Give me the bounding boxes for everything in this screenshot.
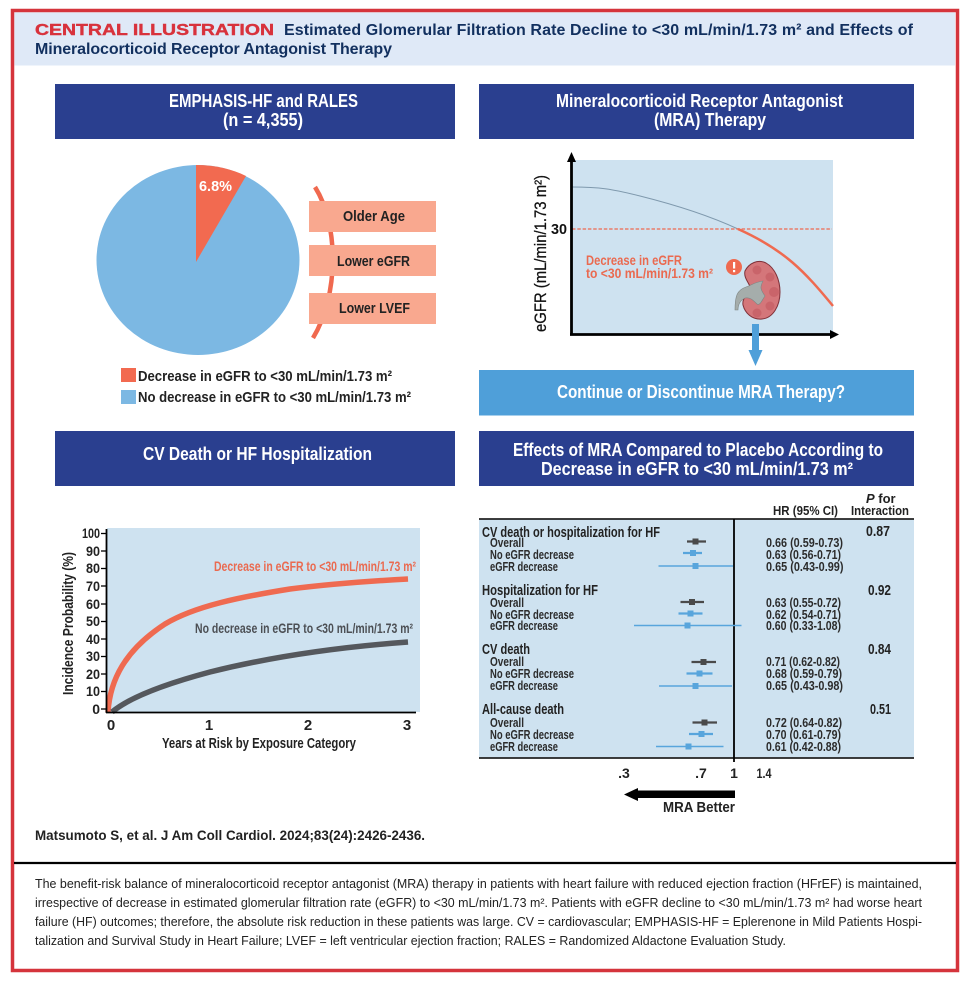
- risk factor: older age: [309, 201, 436, 232]
- incidence curve chart: 0: [107, 717, 115, 734]
- legend: No decrease in eGFR to <30 mL/min/1.73 m²: [138, 389, 411, 406]
- incidence curve chart: Incidence Probability (%): [61, 552, 77, 695]
- outcome: CV death or hospitalization: No eGFR decrease: [490, 548, 574, 562]
- heading: MRA therapy: [479, 84, 914, 139]
- outcome: CV death: No eGFR decrease: [490, 667, 574, 681]
- outcome: all-cause death: All-cause death: [482, 702, 564, 718]
- risk factor arc: [313, 187, 333, 338]
- risk factor: older age: Older Age: [343, 208, 405, 225]
- decision box: Continue or Discontinue MRA Therapy?: [557, 382, 845, 402]
- heading: CV death or HF hospitalization: CV Death or HF Hospitalization: [143, 444, 372, 464]
- outcome: hospitalization for HF: Hospitalization for HF: [482, 583, 598, 599]
- outcome: all-cause death: eGFR decrease: [490, 740, 558, 754]
- incidence curve chart: 20: [86, 666, 100, 682]
- outcome: all-cause death: 0.61 (0.42-0.88): [766, 740, 841, 754]
- outcome: CV death or hospitalization: Overall: [490, 536, 524, 550]
- heading: EMPHASIS-HF and RALES: (n = 4,355): [223, 110, 303, 130]
- incidence curve chart: No decrease in eGFR to <30 mL/min/1.73 m²: [195, 621, 413, 636]
- outcome: CV death: CV death: [482, 642, 530, 658]
- incidence curve chart: 30: [86, 648, 100, 664]
- heading: EMPHASIS-HF and RALES: EMPHASIS-HF and RALES: [169, 91, 358, 111]
- title band: [14, 12, 955, 66]
- forest plot column headers: HR (95% CI): [773, 503, 838, 518]
- forest plot column headers: [773, 491, 909, 518]
- outcome: hospitalization for HF: No eGFR decrease: [490, 608, 574, 622]
- caption text: The benefit-risk balance of mineralocorticoid receptor antagonist (MRA) therapy in patients with heart failure with reduced ejection fraction (HFrEF) is maintained,: [35, 877, 922, 891]
- outcome: CV death or hospitalization: [482, 523, 890, 574]
- incidence curve chart: 70: [86, 578, 100, 594]
- incidence curve chart: Years at Risk by Exposure Category: [162, 736, 356, 752]
- title band: Estimated Glomerular Filtration Rate Decline to <30 mL/min/1.73 m² and Effects of: [284, 22, 914, 39]
- incidence curve chart: 50: [86, 613, 100, 629]
- outcome: hospitalization for HF: Overall: [490, 596, 524, 610]
- eGFR line chart: eGFR (mL/min/1.73 m²): [532, 175, 550, 332]
- eGFR line chart: Decrease in eGFR: [586, 253, 682, 268]
- outcome: CV death: 0.84: [868, 641, 892, 658]
- panel: MRA therapy: [479, 84, 914, 416]
- caption text: talization and Survival Study in Heart Failure; LVEF = left ventricular ejection fraction; RALES = Randomized Aldactone Evaluation Study.: [35, 934, 786, 948]
- outcome: all-cause death: No eGFR decrease: [490, 728, 574, 742]
- outcome: all-cause death: 0.70 (0.61-0.79): [766, 728, 841, 742]
- outcome: CV death: 0.65 (0.43-0.98): [766, 679, 843, 693]
- citation: Matsumoto S, et al. J Am Coll Cardiol. 2024;83(24):2426-2436.: [35, 828, 425, 843]
- incidence curve chart: 100: [82, 525, 100, 541]
- outcome: CV death or hospitalization: 0.87: [866, 523, 890, 540]
- icon: kidney: [735, 261, 780, 319]
- incidence curve chart: 2: [304, 717, 312, 734]
- risk factor: lower LVEF: Lower LVEF: [339, 300, 410, 317]
- risk factor: lower LVEF: [309, 293, 436, 324]
- title band: Mineralocorticoid Receptor Antagonist Therapy: [35, 41, 392, 58]
- incidence curve chart: 80: [86, 560, 100, 576]
- eGFR line chart: 30: [551, 221, 567, 238]
- legend: [121, 368, 411, 406]
- forest plot axis labels: 1.4: [756, 765, 772, 781]
- outcome: all-cause death: [482, 701, 891, 754]
- heading: effects of MRA: Effects of MRA Compared to Placebo According to: [513, 440, 883, 460]
- legend: Decrease in eGFR to <30 mL/min/1.73 m²: [138, 368, 392, 385]
- panel: CV death or HF hospitalization: [55, 431, 455, 752]
- incidence curve chart: Decrease in eGFR to <30 mL/min/1.73 m²: [214, 559, 416, 574]
- outcome: CV death or hospitalization: CV death or hospitalization for HF: [482, 525, 660, 541]
- forest plot axis labels: .7: [695, 765, 707, 781]
- heading: MRA therapy: Mineralocorticoid Receptor Antagonist: [556, 91, 843, 111]
- outcome: CV death or hospitalization: eGFR decrease: [490, 560, 558, 574]
- incidence curve chart: 40: [86, 631, 100, 647]
- incidence curve chart: 60: [86, 596, 100, 612]
- outcome: CV death: Overall: [490, 655, 524, 669]
- caption text: irrespective of decrease in estimated glomerular filtration rate (eGFR) to <30 mL/min/1.73 m². Patients with eGFR decline to <30 mL/min/1.73 m² had worse heart: [35, 896, 923, 910]
- arrow: MRA better: MRA Better: [663, 800, 735, 816]
- forest plot axis labels: .3: [618, 765, 630, 781]
- forest plot column headers: P for: [866, 491, 896, 506]
- outcome: hospitalization for HF: eGFR decrease: [490, 619, 558, 633]
- outcome: CV death: 0.68 (0.59-0.79): [766, 667, 842, 681]
- outcome: all-cause death: Overall: [490, 716, 524, 730]
- outcome: hospitalization for HF: [482, 582, 891, 633]
- outcome: CV death: eGFR decrease: [490, 679, 558, 693]
- outcome: hospitalization for HF: 0.92: [868, 582, 891, 599]
- pie chart: 6.8%: [199, 178, 232, 195]
- caption text: failure (HF) outcomes; therefore, the absolute risk reduction in these patients was large. CV = cardiovascular; EMPHASIS-HF = Eplerenone in Mild Patients Hospi-: [35, 915, 922, 929]
- decision box: [479, 370, 914, 416]
- incidence curve chart: 10: [86, 683, 100, 699]
- heading: MRA therapy: (MRA) Therapy: [654, 110, 766, 130]
- eGFR line chart: [532, 152, 839, 339]
- risk factor: lower eGFR: Lower eGFR: [337, 253, 410, 270]
- outcome: hospitalization for HF: 0.60 (0.33-1.08): [766, 619, 841, 633]
- risk factor: lower eGFR: [309, 245, 436, 276]
- outcome: CV death or hospitalization: 0.63 (0.56-0.71): [766, 548, 841, 562]
- outcome: CV death or hospitalization: 0.65 (0.43-0.99): [766, 560, 844, 574]
- outcome: hospitalization for HF: 0.62 (0.54-0.71): [766, 608, 841, 622]
- incidence curve chart: 3: [403, 717, 411, 734]
- forest plot column headers: Interaction: [851, 503, 909, 518]
- outcome: all-cause death: 0.51: [870, 701, 891, 718]
- panel: EMPHASIS-HF and RALES: [55, 84, 455, 406]
- pie chart: [96, 165, 300, 355]
- outcome: CV death or hospitalization: 0.66 (0.59-0.73): [766, 536, 843, 550]
- incidence curve chart: 90: [86, 543, 100, 559]
- incidence curve chart: 0: [92, 701, 100, 717]
- title band: CENTRAL ILLUSTRATION: [35, 22, 274, 39]
- heading: effects of MRA: [479, 431, 914, 486]
- icon: alert: [726, 259, 742, 275]
- arrow: MRA better: [624, 788, 735, 816]
- outcome: all-cause death: 0.72 (0.64-0.82): [766, 716, 842, 730]
- forest plot axis labels: [618, 765, 772, 781]
- heading: CV death or HF hospitalization: [55, 431, 455, 486]
- forest plot axis labels: 1: [730, 765, 738, 781]
- outcome: CV death: 0.71 (0.62-0.82): [766, 655, 840, 669]
- incidence curve chart: 1: [205, 717, 213, 734]
- outcome: hospitalization for HF: 0.63 (0.55-0.72): [766, 596, 841, 610]
- forest plot: [479, 519, 914, 762]
- panel: effects of MRA compared to placebo: [479, 431, 914, 816]
- incidence curve chart: [61, 525, 420, 752]
- heading: effects of MRA: Decrease in eGFR to <30 mL/min/1.73 m²: [541, 459, 853, 479]
- caption text: [35, 877, 923, 948]
- eGFR line chart: to <30 mL/min/1.73 m²: [586, 266, 713, 281]
- heading: EMPHASIS-HF and RALES: [55, 84, 455, 139]
- outcome: CV death: [482, 641, 892, 693]
- arrow: down to decision: [748, 324, 762, 366]
